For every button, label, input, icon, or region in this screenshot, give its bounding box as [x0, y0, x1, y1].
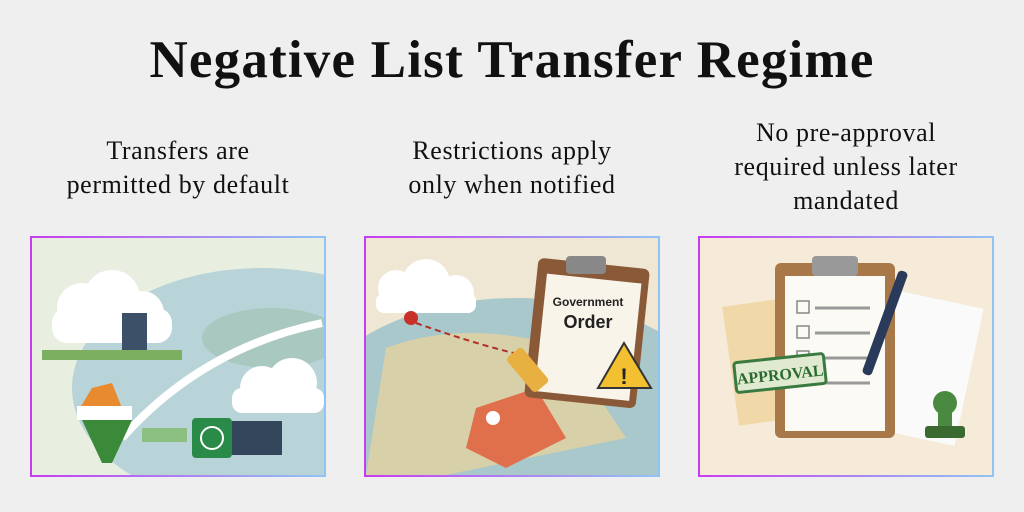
- caption 3: required unless later: [734, 152, 958, 181]
- title: Negative List Transfer Regime: [149, 31, 875, 89]
- caption 2: only when notified: [408, 170, 616, 199]
- caption 2: Restrictions apply: [412, 136, 612, 165]
- panel: transfers permitted: [30, 236, 326, 477]
- panel: no pre-approval: [698, 236, 994, 477]
- caption 1: [67, 136, 289, 199]
- caption 3: [734, 118, 958, 215]
- panel: restrictions when notified: !: [620, 364, 628, 389]
- caption 1: permitted by default: [67, 170, 289, 199]
- panel: restrictions when notified: Order: [563, 312, 613, 332]
- caption 3: mandated: [793, 186, 899, 215]
- panel: restrictions when notified: [364, 236, 660, 477]
- panel: no pre-approval: APPROVAL: [736, 362, 824, 388]
- caption 2: [408, 136, 616, 199]
- caption 1: Transfers are: [106, 136, 250, 165]
- panel: restrictions when notified: Government: [553, 295, 623, 309]
- caption 3: No pre-approval: [756, 118, 936, 147]
